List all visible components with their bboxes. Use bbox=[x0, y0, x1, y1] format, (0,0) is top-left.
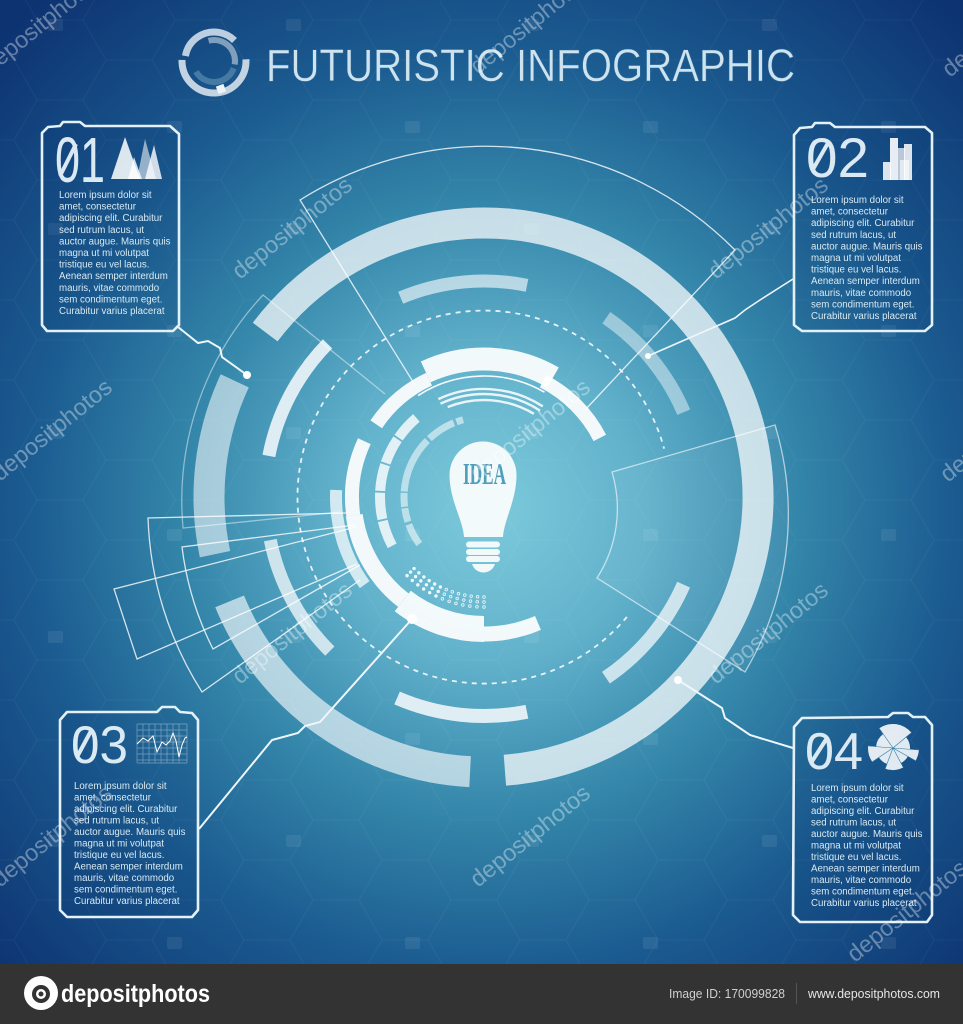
watermarks: depositphotos bbox=[227, 577, 357, 689]
connector 03 bbox=[199, 614, 417, 829]
panel 02 text: Lorem ipsum dolor sit bbox=[811, 195, 904, 206]
panel 03 text: sed rutrum lacus, ut bbox=[74, 816, 159, 826]
icon: buildings bbox=[883, 138, 912, 180]
panel 01 text: Lorem ipsum dolor sit bbox=[59, 190, 152, 201]
website: www.depositphotos.com bbox=[807, 987, 940, 1001]
panel 01 text: sed rutrum lacus, ut bbox=[59, 225, 144, 236]
number 03: 03 bbox=[71, 716, 128, 775]
panel 03 text: mauris, vitae commodo bbox=[74, 873, 174, 884]
panel 01 text: auctor augue. Mauris quis bbox=[59, 236, 171, 247]
watermarks: depositphotos bbox=[465, 374, 595, 486]
panel 04 bbox=[793, 713, 932, 922]
panel 02 text: mauris, vitae commodo bbox=[811, 288, 911, 299]
panel 03 text: auctor augue. Mauris quis bbox=[74, 827, 186, 838]
connector 02 bbox=[645, 279, 793, 359]
bulb label: IDEA bbox=[463, 456, 506, 491]
panel 01 text: mauris, vitae commodo bbox=[59, 283, 159, 294]
panel 01 text: sem condimentum eget. bbox=[59, 294, 162, 305]
panel 03 text: adipiscing elit. Curabitur bbox=[74, 804, 178, 815]
panel 01 bbox=[42, 122, 179, 331]
panel 04 text: mauris, vitae commodo bbox=[811, 875, 911, 886]
panel 03 text: tristique eu vel lacus. bbox=[74, 850, 164, 861]
panel 02 text: auctor augue. Mauris quis bbox=[811, 241, 923, 252]
panel 04 text: adipiscing elit. Curabitur bbox=[811, 806, 915, 817]
panel 01 text: amet, consectetur bbox=[59, 202, 137, 213]
panel 02 text: tristique eu vel lacus. bbox=[811, 265, 901, 276]
image id: Image ID: 170099828 bbox=[669, 987, 785, 1001]
connector 04 bbox=[674, 676, 793, 748]
panel 04 text: sem condimentum eget. bbox=[811, 886, 914, 898]
title: FUTURISTIC INFOGRAPHIC bbox=[266, 40, 795, 91]
panel 02 text: Curabitur varius placerat bbox=[811, 311, 917, 322]
panel 02 text: sed rutrum lacus, ut bbox=[811, 230, 896, 241]
panel 02 text: adipiscing elit. Curabitur bbox=[811, 218, 915, 229]
panel 02 text: magna ut mi volutpat bbox=[811, 253, 901, 264]
panel 04 text: tristique eu vel lacus. bbox=[811, 852, 901, 863]
circular hud: dashed ring bbox=[297, 311, 664, 684]
watermarks: depositphotos bbox=[703, 577, 833, 689]
panel 03 text: Curabitur varius placerat bbox=[74, 896, 180, 907]
segmented inner arcs bbox=[340, 353, 628, 641]
panel 04 text: auctor augue. Mauris quis bbox=[811, 829, 923, 840]
panel 01 text: adipiscing elit. Curabitur bbox=[59, 213, 163, 224]
thin sector outlines bbox=[114, 146, 788, 692]
panel 03 text: amet, consectetur bbox=[74, 792, 152, 804]
panel 01 text: tristique eu vel lacus. bbox=[59, 260, 149, 271]
icon: light bulb bbox=[450, 441, 516, 572]
number 04: 04 bbox=[805, 723, 863, 781]
panel 03 text: sem condimentum eget. bbox=[74, 884, 177, 896]
footer logo bbox=[24, 976, 210, 1010]
panel 02 text: amet, consectetur bbox=[811, 207, 889, 218]
dot matrix bbox=[374, 387, 594, 607]
watermarks: depositphotos bbox=[703, 172, 833, 284]
watermarks: depositphotos bbox=[465, 780, 595, 892]
panel 04 text: Lorem ipsum dolor sit bbox=[811, 783, 904, 794]
number 02: 02 bbox=[806, 126, 869, 189]
icon: radial pie bbox=[868, 724, 919, 770]
panel 01 text: Aenean semper interdum bbox=[59, 271, 168, 282]
panel 04 text: Aenean semper interdum bbox=[811, 864, 920, 874]
panel 02 bbox=[794, 123, 932, 331]
icon: triangles bbox=[111, 137, 162, 179]
title logo bbox=[180, 27, 248, 95]
watermarks: depositphotos bbox=[227, 172, 357, 284]
footer logo: depositphotos bbox=[61, 980, 210, 1008]
panel 03 text: Lorem ipsum dolor sit bbox=[74, 781, 167, 792]
panel 04 text: Curabitur varius placerat bbox=[811, 898, 917, 909]
circular hud: inner stepped ring bbox=[277, 290, 691, 704]
circular hud: outer ring bbox=[100, 113, 868, 881]
panel 03 text: magna ut mi volutpat bbox=[74, 838, 164, 850]
circular hud: middle ring segments bbox=[176, 189, 792, 805]
panel 01 text: magna ut mi volutpat bbox=[59, 248, 149, 259]
panel 04 text: sed rutrum lacus, ut bbox=[811, 818, 896, 828]
panel 04 text: amet, consectetur bbox=[811, 794, 889, 806]
connector 01 bbox=[178, 327, 251, 379]
panel 03 text: Aenean semper interdum bbox=[74, 862, 183, 872]
panel 03 bbox=[60, 707, 198, 917]
chart: line chart on grid bbox=[137, 724, 187, 763]
footer bar bbox=[0, 964, 963, 1024]
panel 02 text: sem condimentum eget. bbox=[811, 299, 914, 310]
panel 01 text: Curabitur varius placerat bbox=[59, 306, 165, 317]
number 01: 01 bbox=[55, 124, 105, 196]
panel 02 text: Aenean semper interdum bbox=[811, 276, 920, 287]
panel 04 text: magna ut mi volutpat bbox=[811, 840, 901, 852]
